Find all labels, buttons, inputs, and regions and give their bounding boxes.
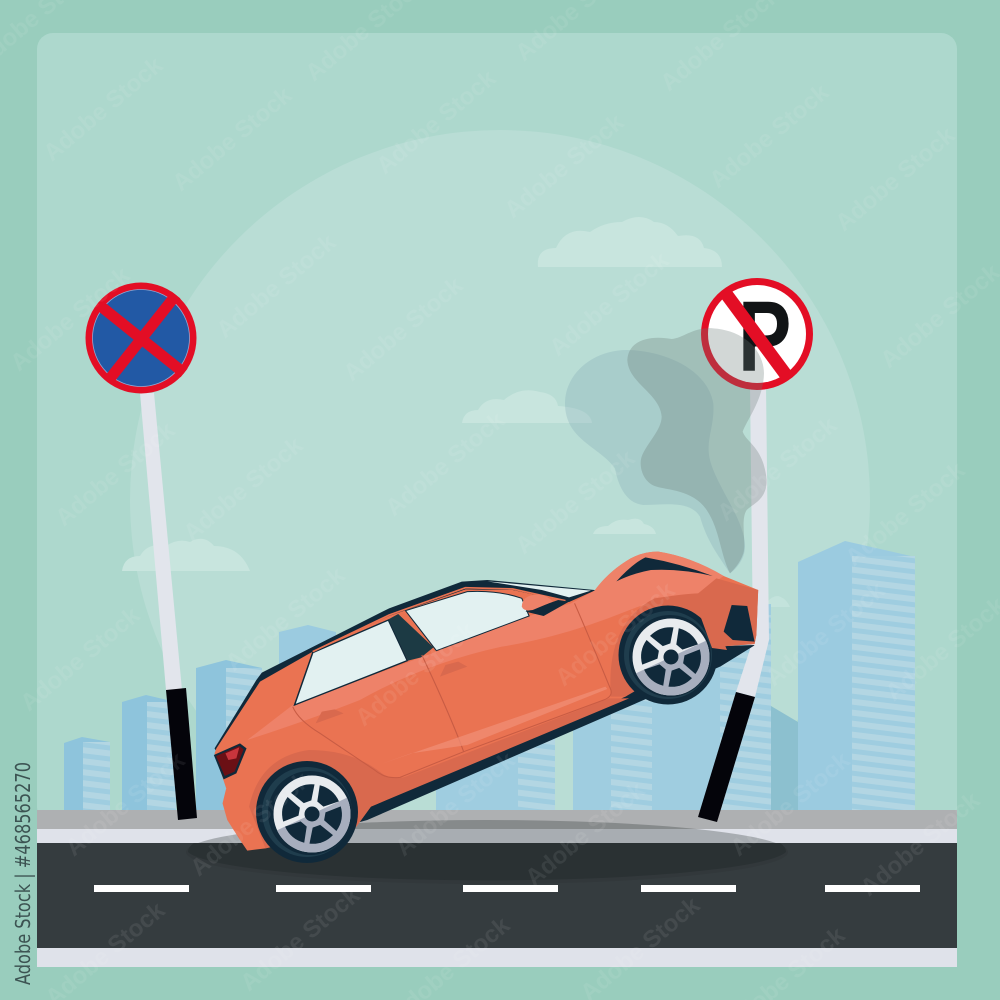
- front window: [405, 591, 529, 651]
- watermarks: Adobe Stock: [499, 108, 630, 224]
- bonnet vent: [616, 557, 713, 581]
- dark smoke: [627, 328, 767, 573]
- rear wheel arch and sill shading: [249, 698, 629, 848]
- watermarks: Adobe Stock: [5, 261, 136, 377]
- building 6: [573, 640, 652, 810]
- left pole black base: [166, 688, 197, 820]
- upper body highlight: [247, 552, 724, 740]
- front wheel arch and nose shading: [610, 578, 758, 697]
- watermarks: Adobe Stock: [520, 776, 651, 892]
- watermarks: Adobe Stock: [60, 746, 191, 862]
- watermarks: Adobe Stock: [338, 271, 469, 387]
- wing mirror: [522, 594, 569, 616]
- left pole white section: [140, 393, 182, 690]
- building 5: [436, 700, 555, 810]
- watermarks: Adobe Stock: [712, 411, 843, 527]
- front door handle: [440, 662, 467, 677]
- rear door handle: [316, 709, 344, 723]
- windscreen strip: [487, 581, 591, 597]
- smoke: [565, 328, 767, 573]
- right pole black base: [698, 692, 755, 822]
- watermarks: Adobe Stock: [840, 456, 971, 572]
- front wheel: [618, 606, 722, 708]
- tail light: [214, 743, 247, 779]
- left sign: no stopping: [86, 282, 196, 394]
- rear wheel: [256, 761, 363, 865]
- front underbody: [711, 645, 755, 667]
- watermarks: Adobe Stock: [220, 561, 351, 677]
- watermarks: Adobe Stock: [510, 444, 641, 560]
- watermarks: Adobe Stock: [178, 431, 309, 547]
- watermarks: Adobe Stock: [704, 78, 835, 194]
- roof trim: [313, 588, 565, 652]
- watermarks: Adobe Stock: [830, 121, 961, 237]
- front bumper corner over wheel: [700, 613, 727, 650]
- road kerb: [37, 829, 957, 843]
- car shadow: [186, 820, 788, 884]
- watermarks: Adobe Stock: [760, 576, 891, 692]
- sidewalk: [37, 810, 957, 829]
- right pole: [698, 385, 769, 822]
- vertical stock id text: Adobe Stock | #468565270: [11, 762, 35, 985]
- building 1: [64, 737, 110, 810]
- window pillar: [388, 614, 433, 661]
- door lines: [293, 603, 611, 778]
- car body: [215, 552, 758, 851]
- watermarks: Adobe Stock: [50, 416, 181, 532]
- watermarks: Adobe Stock: [550, 576, 681, 692]
- building 4: [279, 625, 336, 810]
- light smoke: [565, 350, 745, 573]
- building 7: [652, 604, 771, 810]
- car: [214, 552, 758, 865]
- watermarks: Adobe Stock: [380, 406, 511, 522]
- watermarks: Adobe Stock: [185, 766, 316, 882]
- building 9: [798, 541, 915, 810]
- lower kerb: [37, 948, 957, 967]
- watermarks: Adobe Stock: [167, 81, 298, 197]
- watermarks: Adobe Stock: [211, 228, 342, 344]
- watermarks: Adobe Stock: [855, 786, 986, 902]
- road: [37, 843, 957, 948]
- watermarks: Adobe Stock: [38, 51, 169, 167]
- background circle: [130, 130, 870, 870]
- watermarks: Adobe Stock: [235, 881, 366, 997]
- front grille: [724, 605, 755, 642]
- sky panel: [37, 33, 957, 823]
- watermarks: Adobe Stock: [371, 64, 502, 180]
- clouds: [122, 217, 790, 607]
- watermarks: Adobe Stock: [725, 746, 856, 862]
- building 2: [122, 695, 176, 810]
- car dark underbody and roof outline: [215, 580, 755, 848]
- door shine: [378, 687, 607, 765]
- watermarks: Adobe Stock: [390, 746, 521, 862]
- watermarks: Adobe Stock: [350, 616, 481, 732]
- watermarks: Adobe Stock: [15, 601, 146, 717]
- right sign: no parking: [701, 278, 813, 393]
- city skyline: [64, 541, 915, 810]
- building 3: [196, 660, 262, 810]
- lane markings: [94, 885, 920, 892]
- left pole: [140, 393, 197, 820]
- watermarks: Adobe Stock: [544, 246, 675, 362]
- rear window: [295, 620, 407, 705]
- building 8: [771, 706, 798, 810]
- letter P: P: [738, 282, 791, 393]
- right pole white section: [736, 385, 769, 697]
